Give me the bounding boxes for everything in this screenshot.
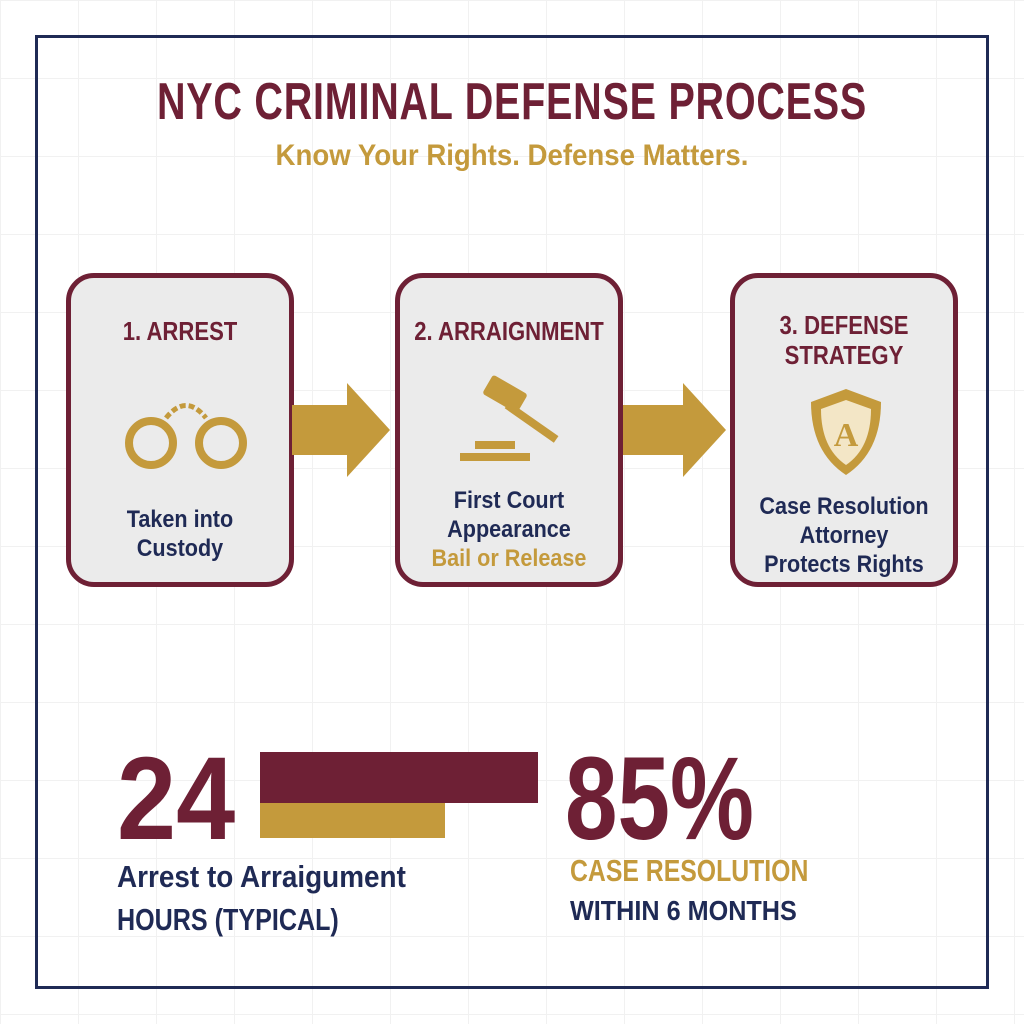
icon: handcuffs (125, 403, 247, 469)
title: NYC CRIMINAL DEFENSE PROCESS (157, 73, 867, 131)
icon: shield: A (834, 417, 859, 454)
arrow 1 (292, 383, 390, 477)
text: case resolution (759, 493, 929, 578)
arrow 2 (623, 383, 726, 477)
label: HOURS (TYPICAL) (117, 902, 339, 937)
text: custody: Custody (137, 535, 223, 562)
label (570, 853, 808, 926)
text: first court appearance: First Court (454, 487, 564, 514)
stat: 85% (565, 733, 808, 926)
label: WITHIN 6 MONTHS (570, 895, 797, 926)
text: first court appearance: Appearance (447, 516, 571, 543)
label: CASE RESOLUTION (570, 853, 808, 888)
text: case resolution: Case Resolution (759, 493, 929, 520)
stat: 24 hours (117, 733, 538, 937)
text: first court appearance: Bail or Release (432, 545, 586, 572)
heading: arrest: 1. ARREST (123, 316, 237, 346)
bar chart (260, 752, 538, 838)
number 85%: 85% (565, 733, 754, 865)
heading: defense strategy: 3. DEFENSE (780, 310, 908, 340)
label (117, 859, 406, 937)
text: custody (127, 506, 233, 562)
number 24: 24 (117, 733, 235, 865)
subtitle: Know Your Rights. Defense Matters. (276, 139, 748, 172)
label: Arrest to Arraigument (117, 859, 406, 894)
icon: shield (811, 389, 881, 475)
text: case resolution: Protects Rights (764, 551, 924, 578)
text: case resolution: Attorney (800, 522, 888, 549)
text: first court appearance (432, 487, 586, 572)
icon: gavel (460, 376, 558, 461)
panel: arrest (66, 273, 294, 587)
panel: arraignment (395, 273, 623, 587)
text: custody: Taken into (127, 506, 233, 533)
heading: defense strategy (780, 310, 908, 370)
heading: arraignment: 2. ARRAIGNMENT (414, 316, 604, 346)
panel: defense strategy (730, 273, 958, 587)
heading: defense strategy: STRATEGY (785, 340, 903, 370)
